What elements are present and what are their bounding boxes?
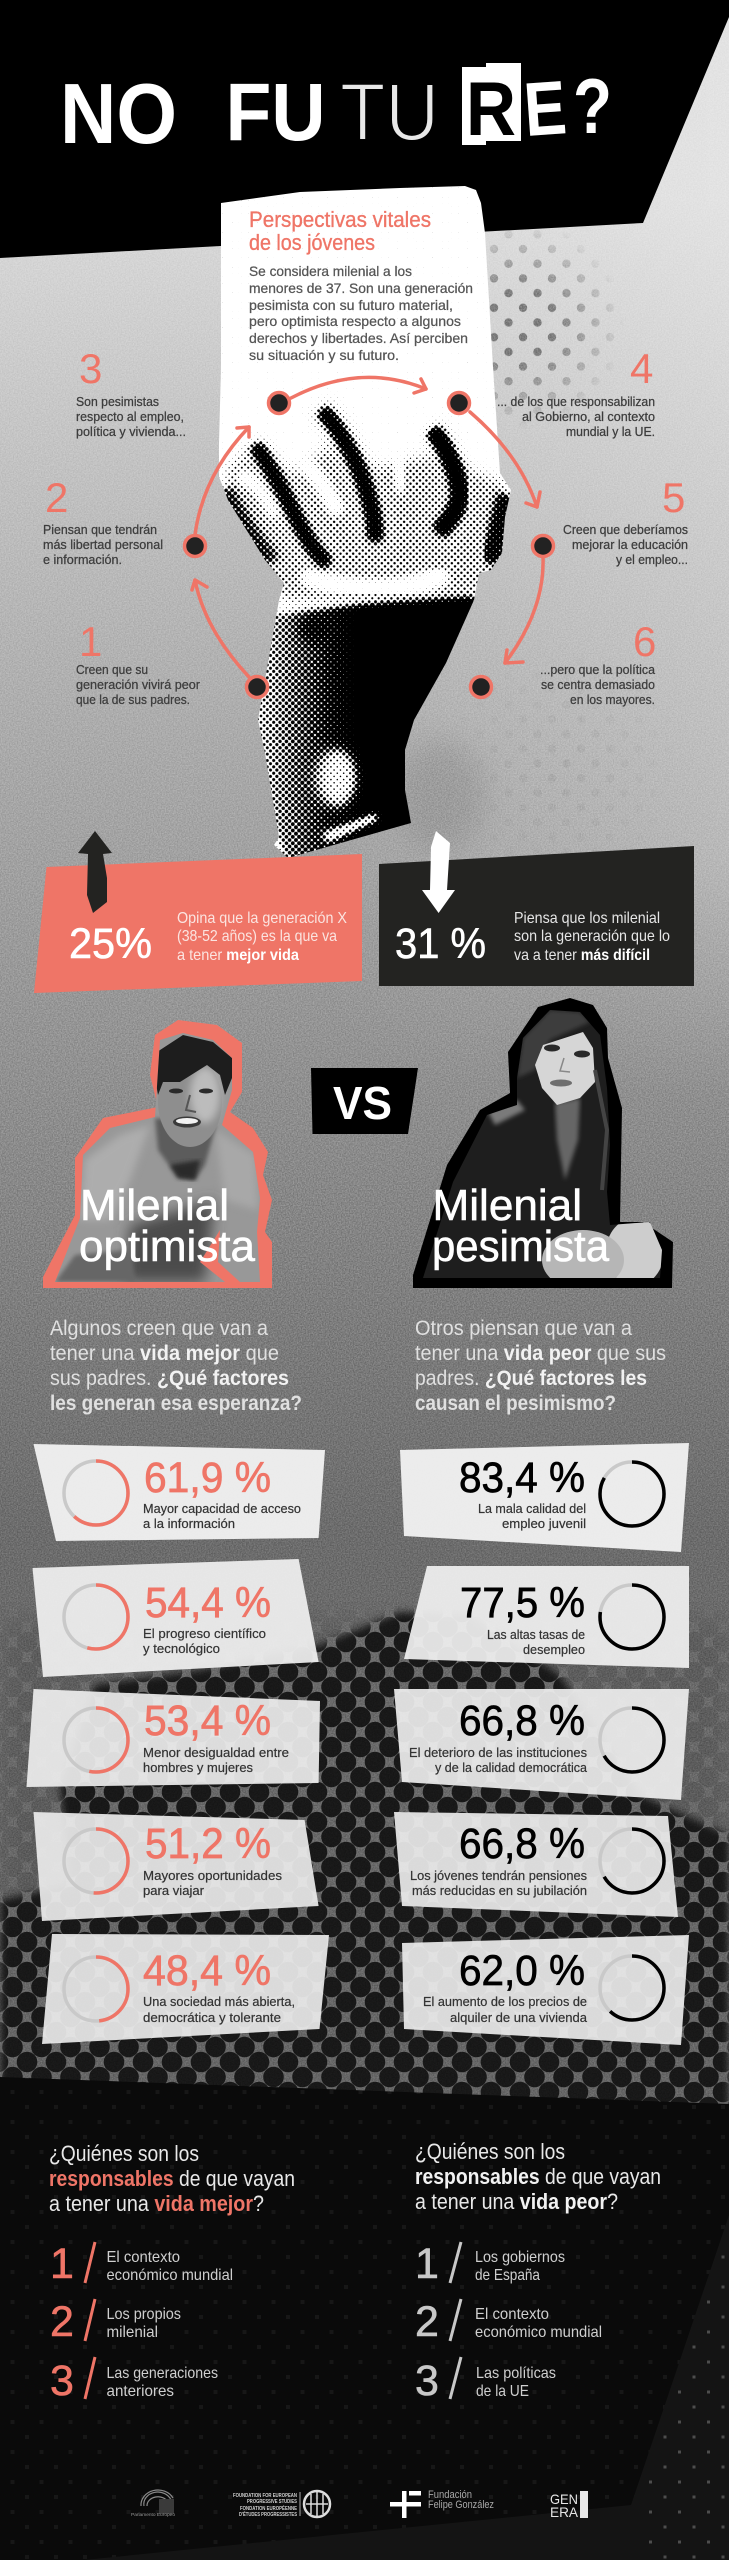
text block: pessimistic question: causan el pesimismo? [415,1392,616,1415]
heading: responsables vida mejor: responsables de que vayan [49,2166,295,2191]
panel: intro text on paper: su situación y su futuro. [249,347,399,363]
ranking: vida mejor: anteriores [106,2383,174,2400]
logo: GENERA: GEN [550,2491,578,2507]
ring chart [600,1956,664,2020]
panel: intro text on paper: Perspectivas vitales [249,207,431,232]
card: 53,4 %: Menor desigualdad entre [143,1746,289,1760]
panel: 31% callout: Piensa que los milenial [514,910,660,927]
point 4: al Gobierno, al contexto [522,410,655,424]
text block: pessimistic question: padres. ¿Qué factores les [415,1367,647,1390]
heading: responsables vida peor: ¿Quiénes son los [415,2139,565,2164]
heading: Milenial pesimista: Milenial [432,1181,582,1230]
card: 66,8 % deterioro: El deterioro de las instituciones [409,1746,587,1760]
logo: Fundación Felipe González: Fundación [428,2489,472,2501]
card: 48,4 %: democrática y tolerante [143,2011,281,2025]
panel: 25% callout: Opina que la generación X [177,910,347,927]
point 5: mejorar la educación [572,538,688,552]
card: 51,2 % [34,1812,319,1921]
heading: Milenial pesimista [432,1181,610,1271]
title: TU [340,67,439,158]
top black panel [0,0,729,258]
hand on paper, halftone [219,186,511,858]
text block: optimistic question [50,1317,302,1415]
card: 51,2 %: para viajar [143,1884,204,1898]
point 3: política y vivienda... [76,425,186,439]
card: 66,8 % pensiones: Los jóvenes tendrán pensiones [410,1869,587,1883]
card: 83,4 % [400,1443,689,1552]
card: 66,8 % pensiones: 66,8 % [459,1820,585,1868]
panel: intro text on paper: pero optimista respecto a algunos [249,313,461,329]
ring chart [600,1585,664,1649]
ranking: vida peor: Las políticas [476,2365,556,2382]
point 4: 4 [630,345,653,392]
logo: Parlamento Europeo: Parlamento Europeo [131,2512,175,2517]
logo: GENERA [550,2491,588,2520]
title: R [466,67,516,152]
heading: responsables vida peor: responsables de que vayan [415,2164,661,2189]
ring chart [600,1829,664,1893]
point 6 [540,618,656,707]
card: 62,0 % [402,1935,689,2045]
panel: 31% callout: son la generación que lo [514,928,670,945]
title: FU [226,67,326,158]
point 2 [43,474,163,567]
panel: 31% callout: 31 % [395,920,486,968]
text block: pessimistic question: Otros piensan que van a [415,1317,632,1340]
point 1: que la de sus padres. [76,693,190,707]
panel: intro text on paper: derechos y libertades. Así perciben [249,330,468,346]
logo: FEPS: FONDATION EUROPÉENNE [240,2504,298,2512]
point 6: 6 [633,618,656,665]
text block: optimistic question: tener una vida mejor que [50,1342,279,1365]
card: 61,9 %: Mayor capacidad de acceso [143,1502,301,1516]
point 1: generación vivirá peor [76,678,200,692]
panel: intro text on paper: de los jóvenes [249,230,375,255]
point 2: Piensan que tendrán [43,523,157,537]
ranking: vida mejor: 3 [50,2357,74,2405]
point 1 [76,618,200,707]
card: 66,8 % pensiones: más reducidas en su jubilación [412,1884,587,1898]
card: 48,4 %: Una sociedad más abierta, [143,1995,295,2009]
VS badge [311,1068,418,1134]
card: 66,8 % pensiones [394,1812,678,1917]
panel: intro text on paper: pesimista con su futuro material, [249,297,453,313]
card: 54,4 %: 54,4 % [145,1579,271,1627]
text block: pessimistic question: tener una vida peor que sus [415,1342,666,1365]
VS badge: VS [333,1077,392,1129]
card: 77,5 %: Las altas tasas de [487,1628,585,1642]
point 4 [497,345,655,439]
point 2: e información. [43,553,122,567]
ring chart [64,1957,128,2021]
point 2: 2 [45,474,68,521]
heading: Milenial optimista: Milenial [80,1181,229,1230]
text block: optimistic question: les generan esa esperanza? [50,1392,302,1415]
logo: FEPS: PROGRESSIVE STUDIES [247,2499,298,2505]
ring chart [64,1461,128,1525]
logo: FEPS [233,2491,330,2518]
panel: 25% callout [34,831,362,993]
heading: responsables vida mejor: ¿Quiénes son los [49,2141,199,2166]
card: 77,5 %: desempleo [523,1643,585,1657]
point 2: más libertad personal [43,538,163,552]
heading: responsables vida peor [415,2139,661,2214]
point 3: 3 [79,345,102,392]
logo: FEPS: FOUNDATION FOR EUROPEAN [233,2493,297,2499]
title: NO [60,67,177,162]
ranking: vida mejor: milenial [106,2324,158,2341]
heading: responsables vida peor: a tener una vida peor? [415,2189,618,2214]
logo: Fundación Felipe González [390,2489,494,2518]
ranking: vida peor: de la UE [476,2383,529,2400]
card: 48,4 %: 48,4 % [143,1947,271,1995]
point 1: 1 [79,618,102,665]
heading: responsables vida mejor: a tener una vida mejor? [49,2191,264,2216]
title: ? [573,62,612,150]
panel: intro text on paper: Se considera milenial a los [249,263,412,279]
ring chart [64,1708,128,1772]
point 6: ...pero que la política [540,663,655,677]
ring chart [64,1585,128,1649]
card: 53,4 %: 53,4 % [144,1697,271,1745]
point 6: en los mayores. [570,693,655,707]
card: 77,5 %: 77,5 % [460,1579,585,1627]
icon: down arrow [422,831,455,913]
logo: FEPS: D'ÉTUDES PROGRESSISTES [239,2510,298,2518]
ranking: vida mejor: 1 [50,2240,74,2288]
card: 77,5 % [404,1566,689,1668]
ranking: vida mejor: El contexto [106,2249,180,2266]
ring chart [64,1829,128,1893]
point 4: ... de los que responsabilizan [497,395,655,409]
ring chart [600,1462,664,1526]
panel: intro text on paper: menores de 37. Son una generación [249,280,473,296]
ranking: vida mejor: Los propios [106,2306,181,2323]
card: 61,9 % [34,1444,325,1541]
ranking: vida peor: 1 [415,2240,439,2288]
ranking: vida peor: Los gobiernos [475,2249,565,2266]
icon: up arrow [78,831,112,913]
ranking: vida peor [415,2240,602,2405]
panel: 25% callout: (38-52 años) es la que va [177,928,337,945]
point 3 [76,345,186,439]
card: 83,4 %: La mala calidad del [478,1502,586,1516]
ring chart [600,1708,664,1772]
card: 54,4 %: El progreso científico [143,1627,266,1641]
card: 62,0 %: 62,0 % [459,1947,585,1995]
ranking: vida peor: El contexto [475,2306,549,2323]
heading: responsables vida mejor [49,2141,295,2216]
logo: Fundación Felipe González: Felipe González [428,2499,494,2511]
card: 53,4 % [26,1689,320,1787]
point 4: mundial y la UE. [566,425,655,439]
ranking: vida peor: económico mundial [475,2324,602,2341]
ranking: vida mejor: 2 [50,2298,74,2346]
panel: 31% callout [379,831,694,986]
ranking: vida mejor: Las generaciones [106,2365,218,2382]
card: 66,8 % deterioro [394,1689,689,1800]
point 1: Creen que su [76,663,148,677]
card: 54,4 %: y tecnológico [143,1642,220,1656]
card: 83,4 %: 83,4 % [459,1454,585,1502]
card: 61,9 %: 61,9 % [144,1454,271,1502]
heading: Milenial optimista [79,1181,256,1271]
portrait: optimistic milenial [40,1020,280,1290]
point 3: Son pesimistas [76,395,159,409]
point 5: Creen que deberíamos [563,523,688,537]
card: 53,4 %: hombres y mujeres [143,1761,253,1775]
card: 62,0 %: El aumento de los precios de [423,1995,587,2009]
card: 51,2 %: 51,2 % [145,1820,271,1868]
heading: Milenial pesimista: pesimista [432,1222,610,1271]
text block: pessimistic question [415,1317,666,1415]
text block: optimistic question: sus padres. ¿Qué factores [50,1367,289,1390]
ranking: vida mejor: económico mundial [106,2267,233,2284]
point 6: se centra demasiado [541,678,655,692]
card: 54,4 % [32,1559,319,1677]
card: 66,8 % deterioro: 66,8 % [459,1697,585,1745]
text block: optimistic question: Algunos creen que van a [50,1317,268,1340]
ranking: vida peor: 2 [415,2298,439,2346]
ranking: vida peor: 3 [415,2357,439,2405]
heading: Milenial optimista: optimista [79,1222,256,1271]
panel: intro text on paper [249,207,473,363]
logo: Parlamento Europeo [131,2490,175,2517]
card: 83,4 %: empleo juvenil [502,1517,586,1531]
card: 66,8 % deterioro: y de la calidad democrática [435,1761,587,1775]
point 3: respecto al empleo, [76,410,184,424]
circular arrows diagram [184,377,554,698]
point 5: y el empleo... [616,553,688,567]
title: E [521,65,569,153]
panel: 31% callout: va a tener más difícil [514,947,650,964]
title [60,62,612,162]
panel: 25% callout: 25% [69,920,152,968]
panel: 25% callout: a tener mejor vida [177,947,299,964]
logo: GENERA: ERA [550,2504,579,2520]
point 5 [563,474,688,567]
ranking: vida peor: de España [475,2267,540,2284]
ranking: vida mejor [50,2240,233,2405]
card: 62,0 %: alquiler de una vivienda [450,2011,587,2025]
bottom black panel [0,2077,729,2560]
point 5: 5 [662,474,685,521]
portrait: pessimistic milenial [410,995,680,1295]
card: 61,9 %: a la información [143,1517,235,1531]
card: 48,4 % [42,1934,329,2044]
card: 51,2 %: Mayores oportunidades [143,1869,282,1883]
